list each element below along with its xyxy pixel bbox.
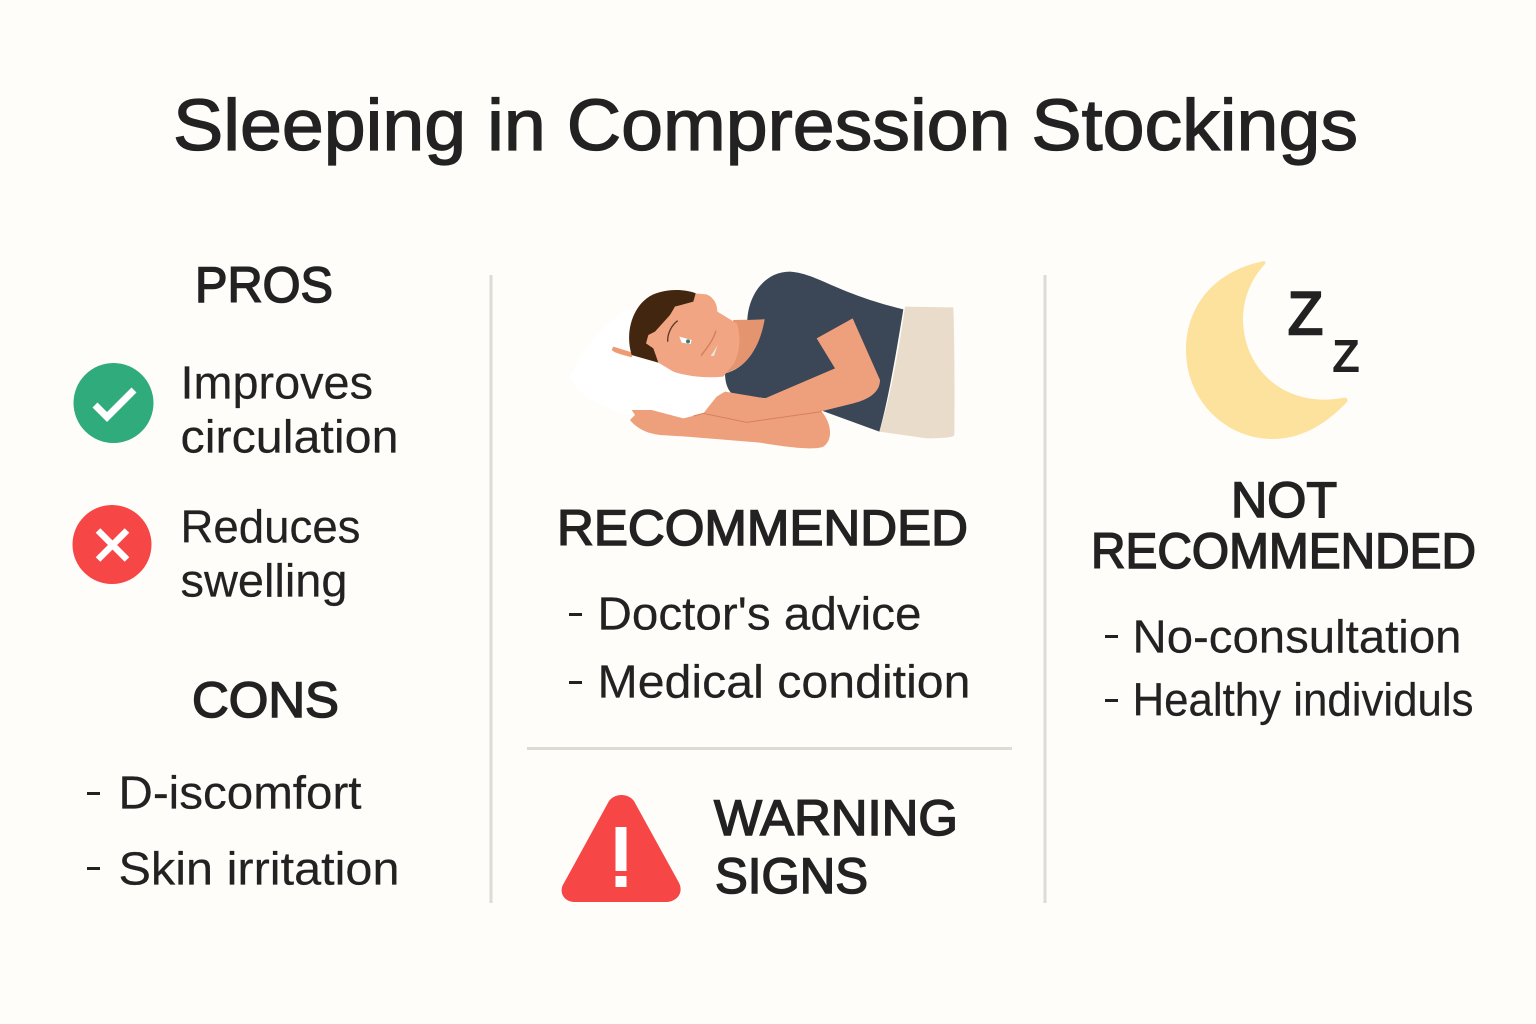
lower arm — [630, 410, 830, 448]
pillow — [570, 310, 727, 418]
panel: not recommended — [1091, 261, 1476, 726]
list: not recommended: Healthy individuls — [1132, 674, 1474, 726]
arm crease — [693, 412, 822, 422]
list: recommended: Medical condition — [598, 656, 970, 708]
text: reduces swelling — [180, 500, 360, 606]
shirt — [725, 272, 903, 432]
icon: warning exclamation mark — [616, 827, 626, 887]
heading: not recommended: RECOMMENDED — [1091, 523, 1476, 579]
panel: recommended — [557, 272, 970, 904]
list: recommended: Doctor's advice — [598, 588, 922, 640]
icon: sleep letters: Z — [1333, 332, 1359, 381]
icon: sleep letters: Z — [1288, 280, 1323, 347]
list: not recommended — [1105, 610, 1474, 726]
text: improves circulation: Improves — [180, 356, 373, 408]
eyebrow — [668, 321, 678, 342]
title: Sleeping in Compression Stockings — [173, 86, 1358, 166]
neck — [720, 319, 765, 375]
panel: pros and cons — [72, 257, 400, 894]
list: cons: Skin irritation — [118, 842, 400, 894]
mouth — [701, 331, 716, 356]
illustration: person sleeping on side — [570, 272, 955, 448]
list: cons: D-iscomfort — [118, 766, 362, 818]
head — [632, 293, 739, 377]
icon: crescent moon — [1186, 261, 1348, 439]
heading: warning signs — [714, 790, 958, 904]
heading: pros: PROS — [195, 257, 333, 313]
heading: warning signs: WARNING — [714, 790, 958, 846]
text: improves circulation — [180, 356, 398, 462]
list: recommended — [569, 588, 970, 708]
icon: red cross — [72, 505, 152, 584]
icon: green check — [74, 363, 154, 443]
finger behind head — [612, 347, 633, 357]
text: reduces swelling: Reduces — [180, 500, 360, 552]
icon: warning triangle — [562, 795, 681, 902]
heading: cons: CONS — [192, 672, 339, 728]
upper arm — [703, 318, 880, 422]
heading: not recommended — [1091, 472, 1476, 579]
eye — [679, 337, 692, 344]
heading: recommended: RECOMMENDED — [557, 500, 968, 556]
icon: sleep letters — [1288, 280, 1359, 381]
hair — [629, 290, 696, 363]
heading: not recommended: NOT — [1231, 472, 1337, 528]
text: reduces swelling: swelling — [180, 554, 348, 606]
text: improves circulation: circulation — [180, 410, 398, 462]
list: cons — [87, 766, 400, 894]
list: not recommended: No-consultation — [1132, 610, 1462, 662]
blanket — [879, 307, 955, 438]
heading: warning signs: SIGNS — [715, 848, 868, 904]
